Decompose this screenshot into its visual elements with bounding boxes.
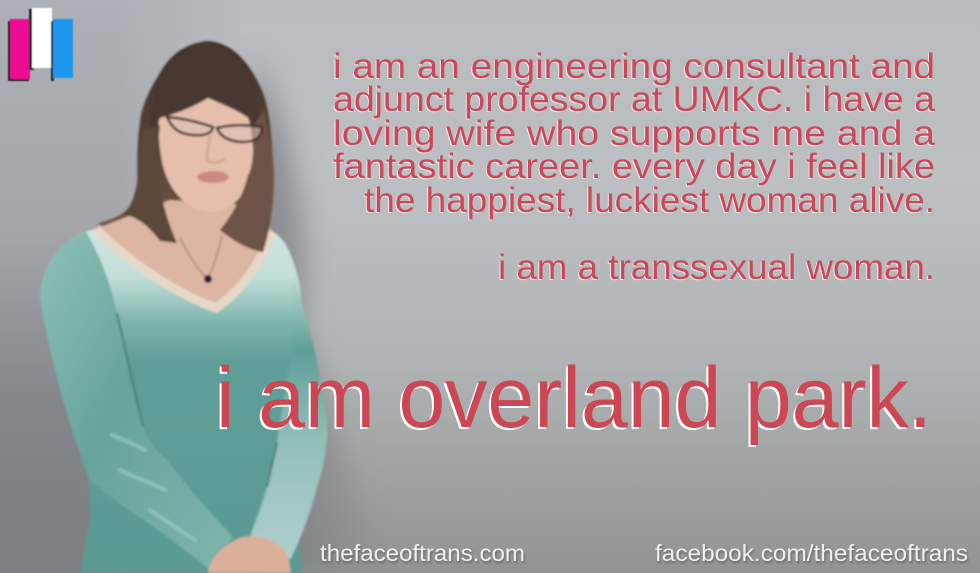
line 5: the happiest, luckiest woman alive.: [364, 181, 935, 220]
lace neckline: [96, 229, 272, 308]
shirt torso: [40, 229, 302, 573]
facebook footer: facebook.com/thefaceoftrans: [655, 540, 968, 566]
side hair left: [123, 125, 177, 243]
hand: [208, 536, 291, 573]
main headline: i am overland park.: [216, 350, 932, 446]
fringe: [146, 42, 262, 150]
neck and chest: [96, 200, 276, 310]
statement text: i am a transsexual woman.: [498, 248, 935, 287]
line 2: adjunct professor at UMKC. i have a: [333, 80, 936, 119]
glasses: [167, 117, 262, 142]
left sleeve: [40, 232, 233, 570]
bio text block: [333, 47, 936, 220]
sleeve fold highlights: [112, 435, 195, 540]
nose: [207, 135, 225, 162]
right sleeve: [250, 280, 327, 560]
mouth: [197, 171, 229, 183]
logo: pink, white and blue bars: [8, 8, 73, 81]
line 4: fantastic career. every day i feel like: [333, 147, 935, 186]
hair back: [97, 41, 274, 252]
side hair right: [220, 110, 274, 252]
line 1: i am an engineering consultant and: [333, 47, 935, 86]
torso shadow between arm and body: [117, 313, 277, 487]
necklace: [180, 236, 222, 278]
face: [159, 90, 253, 212]
line 3: loving wife who supports me and a: [333, 114, 936, 153]
person portrait: [40, 41, 327, 573]
website footer: thefaceoftrans.com: [320, 540, 525, 566]
